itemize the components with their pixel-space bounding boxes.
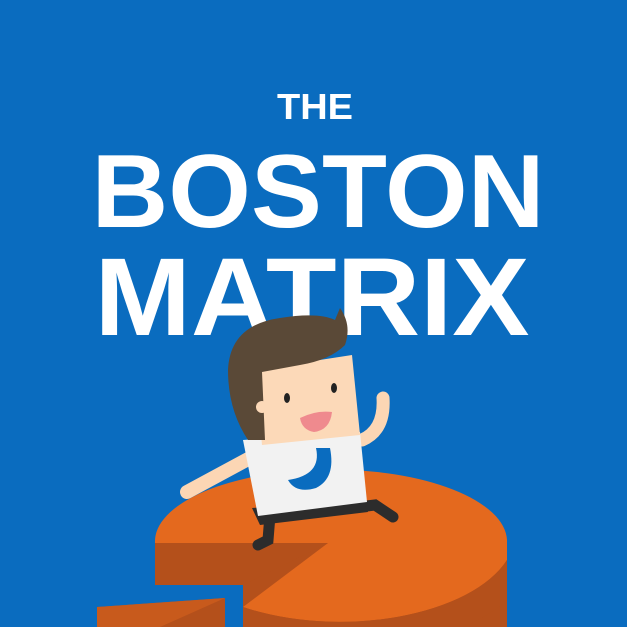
character (187, 308, 393, 545)
arms (187, 458, 250, 492)
face (255, 355, 360, 445)
title: BOSTON (92, 134, 544, 250)
hair (228, 308, 348, 440)
mouth (300, 412, 332, 432)
title (92, 86, 544, 359)
shirt (243, 432, 367, 516)
title: THE (277, 86, 353, 127)
ear (256, 401, 268, 413)
pie chart (97, 469, 507, 627)
legs (258, 515, 270, 545)
separated slice (97, 598, 225, 627)
eyes (284, 393, 290, 403)
title: MATRIX (94, 236, 530, 359)
tie (288, 448, 331, 490)
